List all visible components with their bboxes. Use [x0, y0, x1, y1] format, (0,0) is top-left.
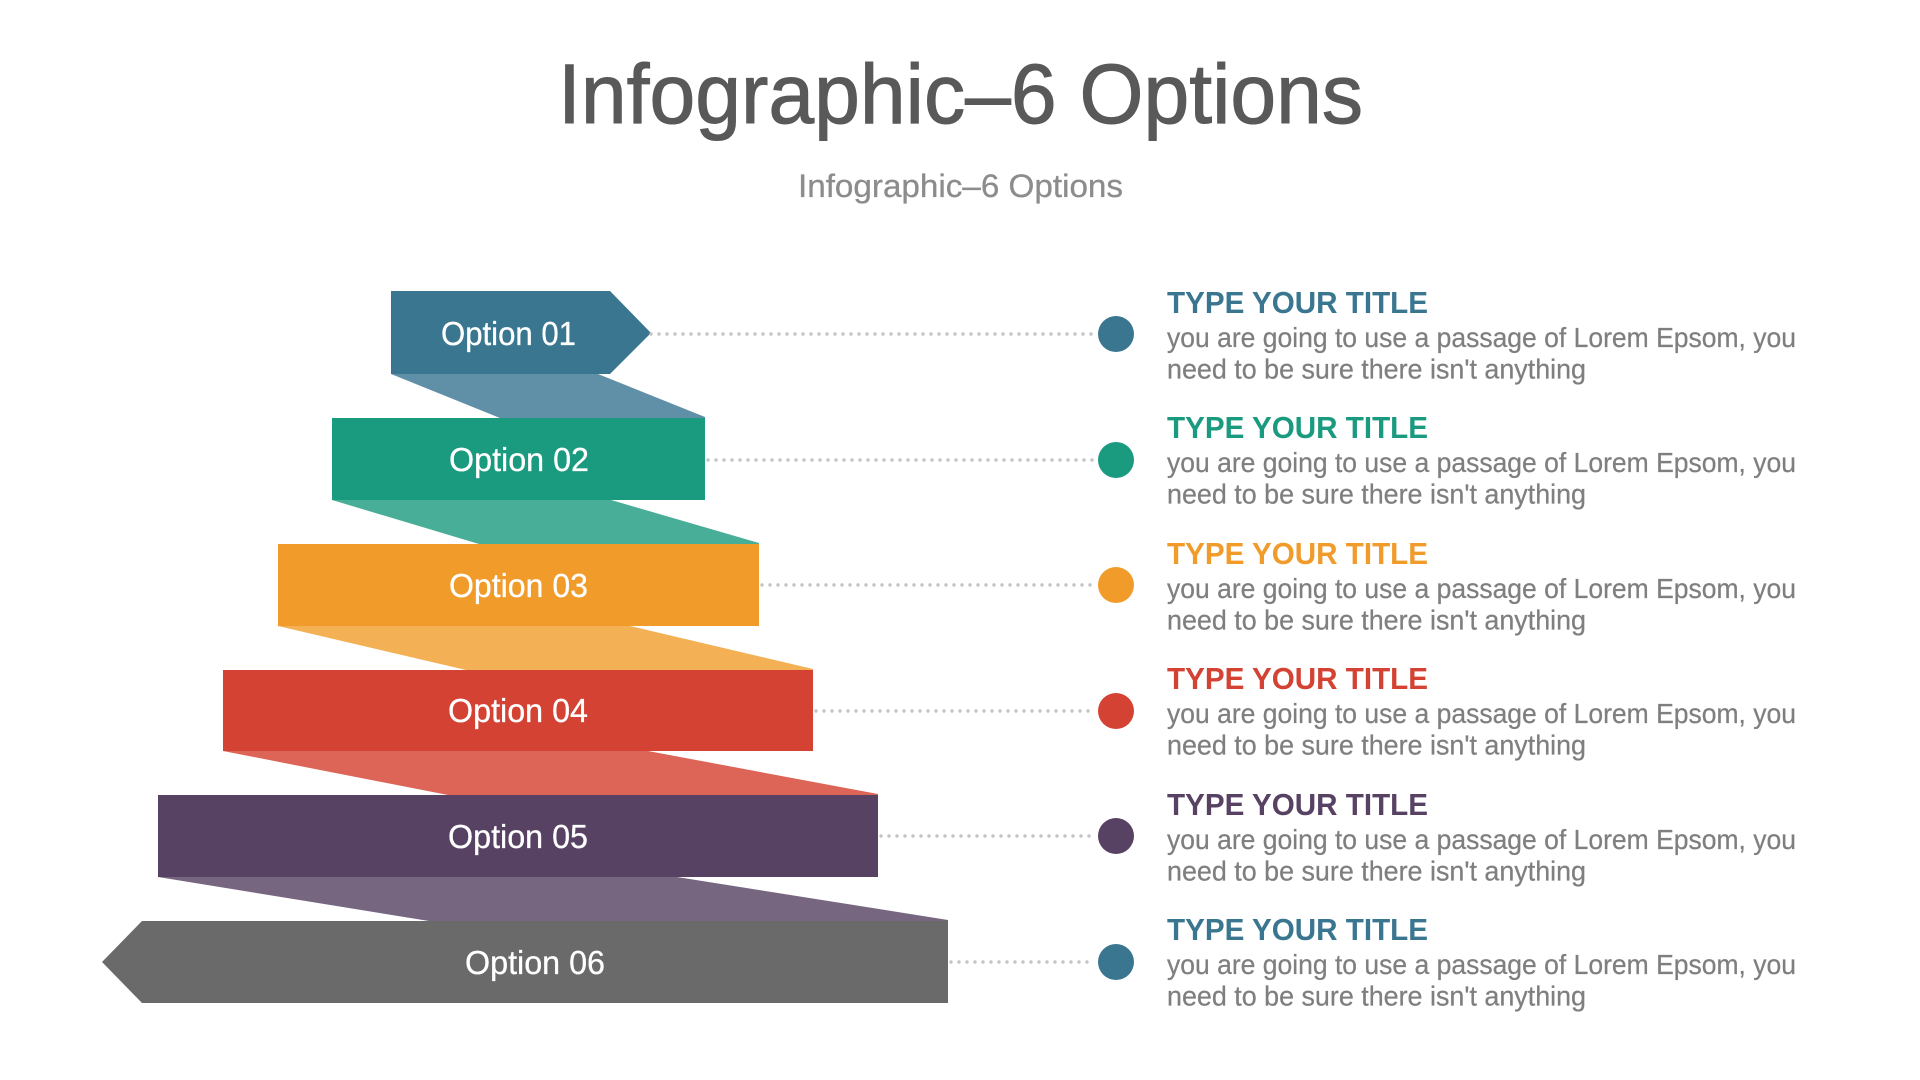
connector: option 02 [708, 458, 1094, 462]
step: option 05: Option 05 [448, 818, 588, 855]
text block: option 04 [1167, 661, 1796, 760]
step: option 01 [391, 291, 651, 374]
connector: option 05 [881, 834, 1094, 838]
step: option 04 [223, 670, 813, 751]
text block: option 01: need to be sure there isn't anything [1167, 354, 1586, 384]
marker dot: option 01 [1098, 316, 1134, 352]
connector: option 06 [951, 960, 1094, 964]
step: option 05 [158, 795, 878, 877]
step: option 03: Option 03 [449, 567, 588, 604]
marker dot: option 04 [1098, 693, 1134, 729]
text block: option 02: you are going to use a passage of Lorem Epsom, you [1167, 447, 1796, 478]
text block: option 03: you are going to use a passage of Lorem Epsom, you [1167, 573, 1796, 604]
text block: option 02: need to be sure there isn't anything [1167, 478, 1586, 510]
text block: option 05: TYPE YOUR TITLE [1167, 787, 1428, 822]
text block: option 01 [1167, 285, 1796, 384]
connector: option 01 [651, 332, 1094, 336]
marker dot: option 05 [1098, 818, 1134, 854]
text block: option 02 [1167, 410, 1796, 510]
connector: option 03 [762, 583, 1094, 587]
ribbon fold: option 03 to 04 [278, 626, 813, 670]
text block: option 04: you are going to use a passage of Lorem Epsom, you [1167, 698, 1796, 729]
step: option 03 [278, 544, 759, 626]
title: Infographic–6 Options [558, 47, 1363, 141]
text block: option 04: TYPE YOUR TITLE [1167, 661, 1428, 696]
text block: option 03: TYPE YOUR TITLE [1167, 536, 1428, 571]
text block: option 04: need to be sure there isn't anything [1167, 730, 1586, 760]
text block: option 03 [1167, 536, 1796, 636]
text block: option 06: TYPE YOUR TITLE [1167, 912, 1428, 947]
subtitle: Infographic–6 Options [798, 168, 1123, 204]
text block: option 06 [1167, 912, 1796, 1012]
step: option 01: Option 01 [441, 315, 576, 352]
ribbon fold: option 01 to 02 [391, 374, 705, 418]
marker dot: option 02 [1098, 442, 1134, 478]
text block: option 06: need to be sure there isn't anything [1167, 980, 1586, 1012]
marker dot: option 06 [1098, 944, 1134, 980]
step: option 06 [102, 921, 948, 1003]
text block: option 05: need to be sure there isn't anything [1167, 856, 1586, 886]
step: option 02 [332, 418, 705, 500]
text block: option 05: you are going to use a passage of Lorem Epsom, you [1167, 824, 1796, 855]
marker dot: option 03 [1098, 567, 1134, 603]
ribbon fold: option 05 to 06 [158, 877, 948, 921]
text block: option 01: you are going to use a passage of Lorem Epsom, you [1167, 322, 1796, 353]
step: option 06: Option 06 [465, 944, 605, 981]
text block: option 02: TYPE YOUR TITLE [1167, 410, 1428, 445]
ribbon fold: option 04 to 05 [223, 751, 878, 795]
text block: option 05 [1167, 787, 1796, 886]
text block: option 06: you are going to use a passage of Lorem Epsom, you [1167, 949, 1796, 980]
ribbon fold: option 02 to 03 [332, 500, 759, 544]
text block: option 01: TYPE YOUR TITLE [1167, 285, 1428, 320]
step: option 02: Option 02 [449, 441, 589, 478]
connector: option 04 [816, 709, 1089, 713]
text block: option 03: need to be sure there isn't anything [1167, 604, 1586, 636]
step: option 04: Option 04 [448, 692, 588, 729]
